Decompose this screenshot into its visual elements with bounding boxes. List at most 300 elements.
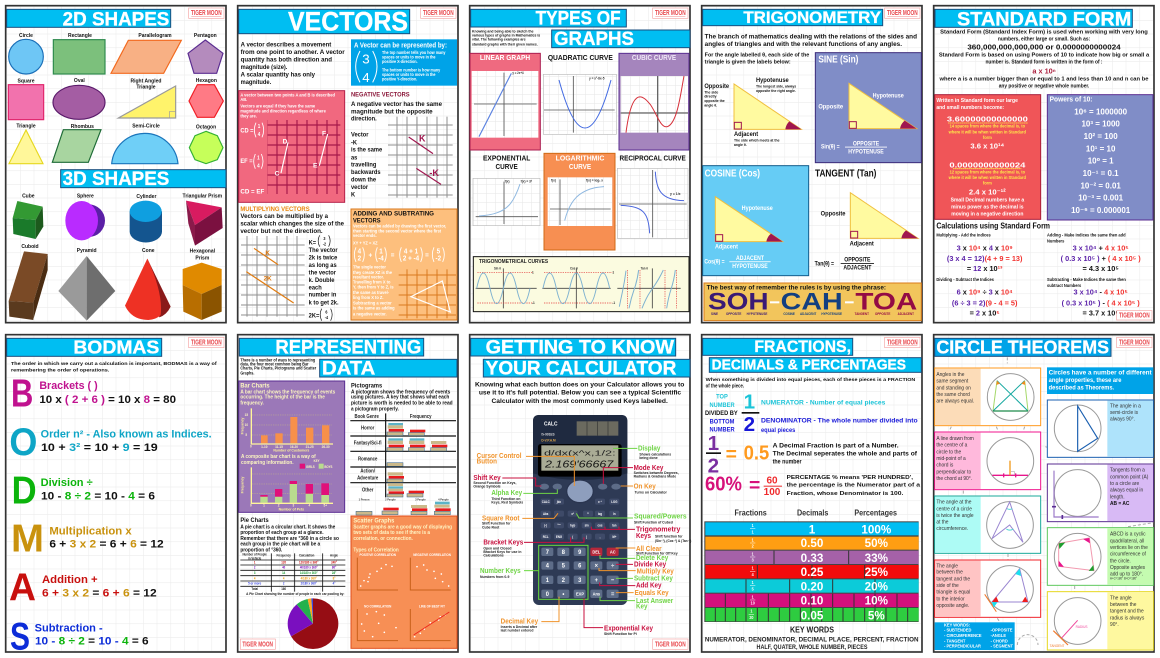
panel: vectors poster (238, 6, 458, 323)
text: definition: quantity has both direction and (241, 56, 332, 63)
table: fraction wall: 5% (868, 609, 885, 622)
callout labels: Exponential Key (604, 625, 653, 632)
panel: vector representation (351, 39, 457, 86)
chart: multiplying vector grid: 2K (264, 276, 272, 283)
shape labels: Octagon (196, 124, 216, 130)
chart: composite bar chart: Frequency (240, 476, 244, 493)
chart: pictogram table: 4 People (438, 497, 449, 502)
icon: pyramid (58, 256, 115, 321)
chart: trigonometrical curves: -1 (612, 301, 615, 305)
panel: cosine: Cos(θ) = (704, 259, 725, 265)
panel: same segment theorem (935, 368, 1041, 426)
shape labels: Semi-Circle (132, 123, 160, 130)
panel: vector representation: spaces or units to move in the (382, 54, 436, 59)
calculator illustration: sin (585, 523, 589, 528)
logo (189, 8, 224, 18)
logo: TIGER MOON (887, 337, 918, 346)
panel: tangent and radius theorem: 90°. (1110, 622, 1119, 628)
diagram: labelled triangle (704, 77, 801, 147)
diagram: decimal fraction: A Decimal Fraction is part of a Number. (773, 443, 899, 450)
panel: circle theorems poster (934, 335, 1154, 652)
panel: adding and subtracting vectors: + (368, 252, 372, 259)
panel: theorem introduction: angle properties, these are (1049, 377, 1122, 384)
heading: BODMAS (7, 337, 162, 358)
calculator illustration: (-) (544, 523, 547, 528)
heading: 2D shapes: 2D SHAPES (63, 9, 169, 30)
text: pictograms: picture is worth is needed to be able to read (351, 401, 453, 407)
callout labels: Add Key (636, 582, 662, 589)
panel: perpendicular chord theorem: perpendicular to (936, 469, 971, 475)
table: fraction wall: 100% (861, 524, 892, 537)
panel: equal vectors: Vectors are equal if they have the same (240, 103, 316, 109)
panel: theorem introduction (1047, 367, 1153, 394)
logo (653, 8, 688, 18)
panel: written in standard form (935, 95, 1041, 219)
chart: negative vector grid: K (419, 133, 426, 143)
panel: cubic curve: CUBIC CURVE (632, 53, 676, 62)
diagram: labelled triangle: directly (704, 94, 717, 99)
chart: quadratic curve (543, 53, 616, 134)
calculator illustration: DEL (592, 549, 601, 554)
panel: equal vectors: they are. (240, 113, 257, 118)
text: calculations using standard form: 6 x 10⁹ ÷ 3 x 10⁴ (957, 288, 1013, 297)
section: subtraction (10, 614, 149, 658)
callout labels: Key (636, 603, 648, 611)
panel: perpendicular chord theorem: the centre of a (936, 442, 967, 449)
panel: adding and subtracting vectors: = (391, 252, 395, 259)
text: pie charts: proportion of each group at a glance. (240, 530, 324, 536)
icon: triangular prism (186, 201, 223, 246)
panel: equal vectors: A vector between two points A and B is described (240, 92, 335, 98)
panel: key words: - PERPENDICULAR (944, 643, 982, 649)
panel: alternate segment theorem: opposite angle. (936, 603, 969, 609)
panel: BODMAS poster (6, 335, 226, 658)
section: subtraction: 10 - 8 ÷ 2 = 10 - 4 = 6 (35, 636, 149, 648)
text: introduction: When something is divided into equal pieces, each of these pieces is a FRACTION (706, 377, 916, 383)
diagram: labelled triangle: The longest side, always (756, 84, 796, 89)
panel: sine: Sin(θ) = (821, 144, 840, 150)
heading: types of graphs: GRAPHS (554, 29, 634, 50)
panel: written in standard form: minus power as the decimal is (951, 204, 1024, 210)
diagram: labelled triangle: opposite the right angle. (756, 89, 796, 93)
chart: exponential curve: f(x) (505, 179, 510, 184)
panel: same segment theorem: the same chord (936, 392, 970, 398)
text: calculations using standard form: Calculations using Standard Form (936, 222, 1050, 231)
panel: semi-circle theorem: always 90°. (1110, 416, 1135, 423)
calculator illustration: − (611, 577, 615, 584)
panel: adding and subtracting vectors: Travelling from X to (353, 279, 391, 284)
logo: TIGER MOON (887, 8, 918, 17)
text: multiplying vectors: K= (309, 239, 316, 246)
text: intro: vital. The following examples are (472, 37, 526, 42)
diagram: numerator and denominator (705, 391, 918, 436)
table: fraction wall: 1 (752, 537, 754, 542)
text: calculations using standard form: = 2 x 10⁵ (970, 308, 1000, 317)
shape labels: Oval (74, 78, 85, 84)
text: negative vectors: NEGATIVE VECTORS (351, 92, 410, 99)
chart: reciprocal curve (617, 154, 688, 238)
text: calculations using standard form: subtract Numbers (1047, 283, 1082, 288)
panel: cubic curve (619, 53, 689, 150)
chart: exponential curve: f(x) = 3ˣ (521, 179, 533, 184)
table: fraction wall: 1 (752, 580, 754, 585)
chart: composite bar chart: KEY (314, 459, 320, 463)
panel: adding and subtracting vectors: is the same as adding (353, 305, 395, 311)
table: fraction wall: 3 (752, 557, 754, 563)
chart: pictogram table: 1 Person (359, 497, 370, 502)
panel: written in standard form: where it will be when written in Standard (948, 175, 1026, 180)
shape labels: Cube (22, 193, 35, 199)
text: calculations using standard form: Dividing - Subtract the Indices (936, 277, 995, 282)
table: pie chart data: 2/180 x 360° (301, 581, 318, 586)
text: calculations using standard form: ( 0.3 x 10⁵ ) - ( 4 x 10⁵ ) (1062, 299, 1140, 308)
chart: pie chart: A Pie Chart showing the number of people in each car pooling by: (246, 592, 344, 596)
calculator illustration: hyp (570, 523, 575, 528)
logo (885, 337, 920, 348)
panel: equal vectors: 4 (258, 132, 261, 138)
panel: equal vectors: 1 (258, 124, 261, 130)
heading: vectors: VECTORS (288, 7, 408, 37)
panel: written in standard form: form (983, 180, 992, 185)
panel: scatter graphs: LINE OF BEST FIT (419, 604, 445, 608)
heading: fractions decimals percentages: FRACTIONS, (754, 337, 851, 356)
heading: types of graphs (471, 9, 690, 50)
callout descriptions: Shift Function for (482, 521, 511, 526)
chart: trigonometrical curves: Sin θ (494, 266, 501, 270)
section: subtraction: Subtraction - (35, 622, 103, 634)
diagram: labelled triangle: The side (704, 90, 718, 95)
diagram: percentage: PERCENTAGE % means 'PER HUNDRED', (787, 475, 913, 481)
calculator illustration: LOG (611, 500, 618, 504)
logo (240, 639, 275, 649)
section: multiplication: Multiplication x (49, 525, 132, 537)
panel: logarithmic curve: CURVE (569, 162, 591, 171)
chart: bar chart: 21-25 (306, 445, 314, 449)
panel: vector representation: 3 (362, 51, 370, 66)
text: multiplying vectors (240, 206, 344, 321)
table: fraction wall: 20% (865, 580, 889, 593)
calculator illustration: 1 (546, 577, 549, 584)
diagram: percentage: the percentage is the Numerator part of a (787, 483, 921, 489)
callout labels: Button (477, 458, 497, 466)
text: negative vectors: magnitude but the opposite (351, 108, 433, 115)
panel: adding and subtracting vectors: -4 (378, 255, 384, 263)
table: pie chart data: Frequency (276, 553, 291, 558)
chart: trigonometrical curves: 1 (532, 270, 534, 274)
panel: theorem introduction: described as Theorems. (1049, 384, 1114, 391)
table: fraction wall: 1 (752, 523, 754, 528)
diagram: numerator and denominator: DIVIDED BY (705, 410, 739, 417)
text: intro: Knowing and being able to sketch the (472, 29, 534, 33)
section: multiplication: M (11, 517, 44, 561)
panel: bar charts: Bar Charts (240, 382, 270, 389)
text: calculations using standard form: Subtracting - Make Indices the same then (1047, 277, 1126, 282)
panel: linear graph: LINEAR GRAPH (480, 53, 530, 62)
chart: multiplying vector grid (241, 236, 305, 317)
logo (189, 337, 224, 348)
table: fraction wall: 5 (752, 586, 754, 591)
table: pie chart data: 240° (331, 560, 338, 564)
heading: fractions decimals percentages (703, 337, 921, 374)
panel: alternate segment theorem: between the (936, 569, 963, 576)
calculator illustration: fx-991ES (541, 432, 555, 436)
shape labels: Cone (142, 248, 155, 254)
panel: cyclic quadrilateral theorem: ABCD is a cyclic (1110, 531, 1146, 538)
panel: angle at centre theorem: The angle at the (936, 499, 971, 506)
panel: powers of 10: 10⁶ = 1000000 (1074, 107, 1128, 116)
text: introduction: angles of triangles and with the relevant functions of any angles. (705, 41, 902, 48)
chart: bar chart: 26-30 (322, 445, 330, 449)
diagram: decimal fraction: the number (773, 459, 802, 466)
chart: exponential curve: EXPONENTIAL (483, 154, 531, 163)
panel: adding and subtracting vectors: XY + YZ = XZ (353, 240, 378, 245)
panel: perpendicular chord theorem (935, 432, 1041, 490)
chart: trigonometrical curves: 1 (612, 270, 614, 274)
shape labels: Rectangle (68, 33, 92, 39)
diagram: numerator and denominator: NUMERATOR - Number of equal pieces (761, 399, 886, 406)
panel: key words: - SUBTENDED (944, 627, 971, 633)
calculator illustration: ENG (556, 535, 563, 539)
calculator illustration: M+ (612, 535, 617, 539)
text: calculations using standard form: ( 0.3 x 10⁵ ) + ( 4 x 10⁵ ) (1061, 254, 1141, 263)
panel: cosine: HYPOTENUSE (732, 264, 768, 270)
diagram: percentage: = (749, 475, 760, 496)
calculator illustration: x² (571, 512, 574, 516)
calculator illustration: ^ (587, 512, 589, 516)
panel: cosine (703, 166, 809, 276)
chart: composite bar chart: BOYS (324, 465, 332, 469)
text: introduction: triangle is given the labels below: (705, 59, 791, 65)
panel: written in standard form: and small numbers become: (936, 105, 1004, 111)
text: introduction (706, 377, 916, 389)
calculator illustration: 6 (578, 562, 582, 570)
chart: quadratic curve: QUADRATIC CURVE (548, 53, 613, 62)
panel: SOH CAH TOA: SINE (711, 312, 719, 316)
panel: scatter graphs (351, 516, 457, 648)
panel: alternate segment theorem: side of the (936, 583, 959, 589)
table: fraction wall: 33% (865, 552, 889, 565)
diagram: percentage: 60% (705, 473, 742, 495)
table: pie chart data: 3 (254, 571, 256, 575)
heading: 3D shapes (61, 169, 226, 190)
panel: written in standard form: 3.6 x 10¹⁴ (970, 142, 1005, 151)
diagram: decimal fraction: 1 (708, 432, 719, 455)
panel: key words: KEY WORDS: (944, 622, 970, 627)
callout descriptions: Shift Function for Pi (604, 632, 637, 636)
chart: pictogram table: Frequency (410, 414, 432, 419)
section: addition: 6 + 3 x 2 = 6 + 6 = 12 (42, 587, 157, 599)
panel: bar charts: frequency. (240, 400, 264, 407)
callout descriptions: Switches between Degrees, (634, 471, 679, 475)
panel: SOH CAH TOA: TOA (855, 288, 917, 315)
table: fraction wall: 2 (752, 543, 754, 549)
diagram: labelled triangle: Hypotenuse (756, 77, 789, 84)
callout labels: Keys (636, 533, 651, 540)
callout labels: Subtract Key (634, 575, 673, 582)
heading: BODMAS: BODMAS (73, 337, 159, 358)
chart: trigonometrical curves: Tan θ (641, 266, 648, 270)
chart: bar chart: 10 (245, 423, 248, 427)
panel: tangent and radius theorem: The angle (1110, 595, 1132, 601)
panel: logarithmic curve: LOGARITHMIC (556, 154, 605, 163)
text: pie charts: each group in the pie chart will be a (240, 541, 320, 548)
callout leader lines (502, 448, 637, 628)
panel: angle at centre theorem: at the (936, 519, 949, 526)
panel: powers of 10: 10⁰ = 1 (1088, 157, 1114, 166)
panel: SOH CAH TOA: OPPOSITE (875, 312, 891, 316)
text: introduction: The order in which we carry out a calculation is important, BODMAS is a way of (11, 361, 217, 367)
callout descriptions: Cube Root (482, 525, 500, 529)
diagram: numerator and denominator: 2 (744, 413, 755, 436)
calculator illustration: 9 (578, 549, 582, 556)
section: addition (9, 566, 157, 610)
text: negative vectors: down the (351, 176, 377, 183)
callout descriptions: Orange Symbols (473, 484, 501, 489)
heading: representing data: DATA (322, 358, 375, 379)
table: fraction wall: 10 (751, 600, 755, 606)
text: multiplying vectors: 3 (323, 236, 326, 241)
calculator illustration: RCL (543, 535, 549, 539)
callout descriptions: Shift Function for Off Key (636, 551, 679, 556)
panel: adding and subtracting vectors: then starting the second vector where the first (353, 228, 442, 234)
callout descriptions: (Sin⁻¹), (Cos⁻¹) & (Tan⁻¹) (655, 539, 691, 543)
panel: sine: OPPOSITE (853, 141, 879, 147)
text: negative vectors: Vector (351, 131, 369, 139)
table: pie chart data: Total (251, 587, 258, 591)
panel: tangents theorem: to a circle are (1110, 481, 1139, 487)
text: negative vectors: as (351, 154, 358, 161)
diagram: percentage: 60 (766, 476, 778, 487)
text: introduction: Standard Form is based on using Powers of 10 to indicate how big or small a (939, 53, 1150, 59)
panel: alternate segment theorem (935, 560, 1041, 617)
text: multiplying vectors: scalar which changes the size of the (240, 220, 344, 227)
chart: bar chart: 11-15 (275, 445, 283, 449)
heading: trigonometry: TRIGONOMETRY (743, 8, 881, 27)
panel: equal vectors: 1 (257, 155, 260, 161)
chart: composite bar chart: GIRLS (306, 465, 315, 469)
text: key words: HALF, QUATER, WHOLE NUMBER, PIECES (757, 645, 868, 651)
table: fraction wall: Fractions (735, 508, 767, 518)
diagram: numerator and denominator: 1 (744, 391, 755, 414)
section: division: 10 - 8 ÷ 2 = 10 - 4 = 6 (41, 490, 155, 502)
chart: exponential curve (473, 154, 540, 226)
logo (653, 639, 688, 649)
callout labels (473, 445, 687, 632)
section: subtraction: S (10, 614, 30, 658)
calculator illustration: CALC (542, 500, 550, 504)
heading: representing data: REPRESENTING (275, 338, 421, 359)
diagram: tangent: OPPOSITE (844, 257, 871, 264)
panel: vector representation: The bottom number is how many (382, 67, 441, 73)
panel: alternate segment theorem: tangent and the (936, 576, 970, 582)
section: order: O (9, 420, 37, 464)
panel: equal vectors: F (322, 130, 326, 137)
callout labels: Multiply Key (637, 568, 674, 575)
text: definition: A scalar quantity has only (241, 71, 315, 78)
table: fraction wall: 1 (752, 565, 754, 571)
panel: adding and subtracting vectors: 4 + 1 (404, 248, 418, 255)
chart: composite bar chart: 2 (278, 503, 280, 508)
callout labels: Bracket Keys (483, 539, 523, 547)
shape labels: Square (17, 78, 35, 84)
panel: same segment theorem: are always equal. (936, 398, 974, 405)
table: fraction wall: 1 (750, 608, 753, 614)
calculator illustration: °'" (557, 523, 561, 528)
chart: pictogram table: 2 People (385, 497, 396, 502)
diagram: labelled triangle: opposite the (704, 99, 725, 103)
panel: cyclic quadrilateral theorem: circumference of (1110, 551, 1146, 558)
panel: tangent and radius theorem: TANGENT (1050, 644, 1064, 648)
logo (421, 8, 456, 18)
text: intro: There is a number of ways to representing (240, 357, 316, 362)
panel: SOH CAH TOA: HYPOTENUSE (747, 312, 768, 316)
panel: written in standard form: 2.4 x 10⁻¹² (969, 188, 1006, 197)
icon: cone (125, 259, 171, 320)
table: pie chart data: 14/180 x 360° (300, 571, 318, 575)
text: pictograms: Pictograms (351, 382, 383, 389)
text: introduction (705, 33, 917, 65)
text: introduction (475, 381, 684, 405)
text: multiplying vectors: the vector (309, 269, 337, 276)
panel: key words: -OPPOSITE (991, 627, 1013, 633)
callout labels: Divide Key (634, 561, 666, 568)
panel: cyclic quadrilateral theorem: add up to 180°. (1110, 571, 1143, 578)
shape labels: Hexagonal (190, 248, 215, 254)
panel: perpendicular chord theorem: chord is (936, 462, 954, 469)
callout descriptions: Third Function on (491, 497, 521, 501)
panel: angle at centre theorem: centre of a circle (936, 506, 972, 512)
panel: vector representation: The top number tells you how many (382, 50, 446, 55)
shape labels: Triangle (136, 84, 156, 91)
panel: adding and subtracting vectors: The single vector (353, 264, 386, 270)
heading: circle theorems: CIRCLE THEOREMS (936, 337, 1109, 358)
text: introduction: remembering the order of operations. (11, 368, 110, 374)
text: intro: various types of graphs in Mathematics is (472, 33, 540, 38)
diagram: labelled triangle: Adjacent (734, 131, 758, 138)
panel: tangents theorem: always equal in (1110, 487, 1143, 494)
text: intro (240, 357, 317, 375)
callout descriptions: Inserts a Decimal after (501, 625, 538, 629)
panel: adding and subtracting vectors: resultant vector. (353, 274, 384, 279)
calculator illustration: x⁻¹ (598, 500, 602, 504)
panel: semi-circle theorem: The angle in a (1110, 403, 1141, 409)
text: pie charts (240, 517, 340, 554)
table: fraction wall: 50% (865, 537, 889, 550)
text: multiplying vectors: 2k is twice (309, 254, 338, 261)
calculator illustration: + (595, 577, 598, 584)
callout descriptions: Radians & Gradians Mode (634, 474, 676, 479)
text: calculations using standard form: 3 x 10⁴ - 4 x 10⁵ (1073, 288, 1128, 297)
chart: pictogram table: 3 People (415, 497, 426, 502)
section: brackets: 10 x ( 2 + 6 ) = 10 x 8 = 80 (39, 394, 176, 406)
panel: written in standard form: Written in Standard form our large (936, 98, 1018, 104)
text: intro: data, the four most common being Bar (240, 361, 309, 366)
calculator illustration: D-V.P.A.M (541, 438, 556, 443)
panel: adding and subtracting vectors: ling from X to Z. (353, 295, 383, 300)
text: negative vectors: A negative vector has the same (351, 101, 442, 108)
chart: bar chart: Number of Customers (273, 448, 309, 452)
diagram: numerator and denominator: DENOMINATOR - The whole number divided into (761, 417, 918, 424)
panel: bar charts: A bar chart shows the frequency of events (240, 389, 335, 395)
panel: logarithmic curve: f(x) (551, 178, 556, 183)
calculator illustration: ln (613, 512, 616, 516)
chart: composite bar chart (240, 459, 333, 511)
panel: trigonometry poster (702, 6, 922, 323)
panel: scatter graphs: POSITIVE CORRELATION (360, 553, 397, 557)
text: multiplying vectors: -2 (323, 241, 327, 246)
panel: perpendicular chord theorem: circle to the (936, 449, 961, 455)
text: definition: magnitude (size). (241, 64, 288, 71)
